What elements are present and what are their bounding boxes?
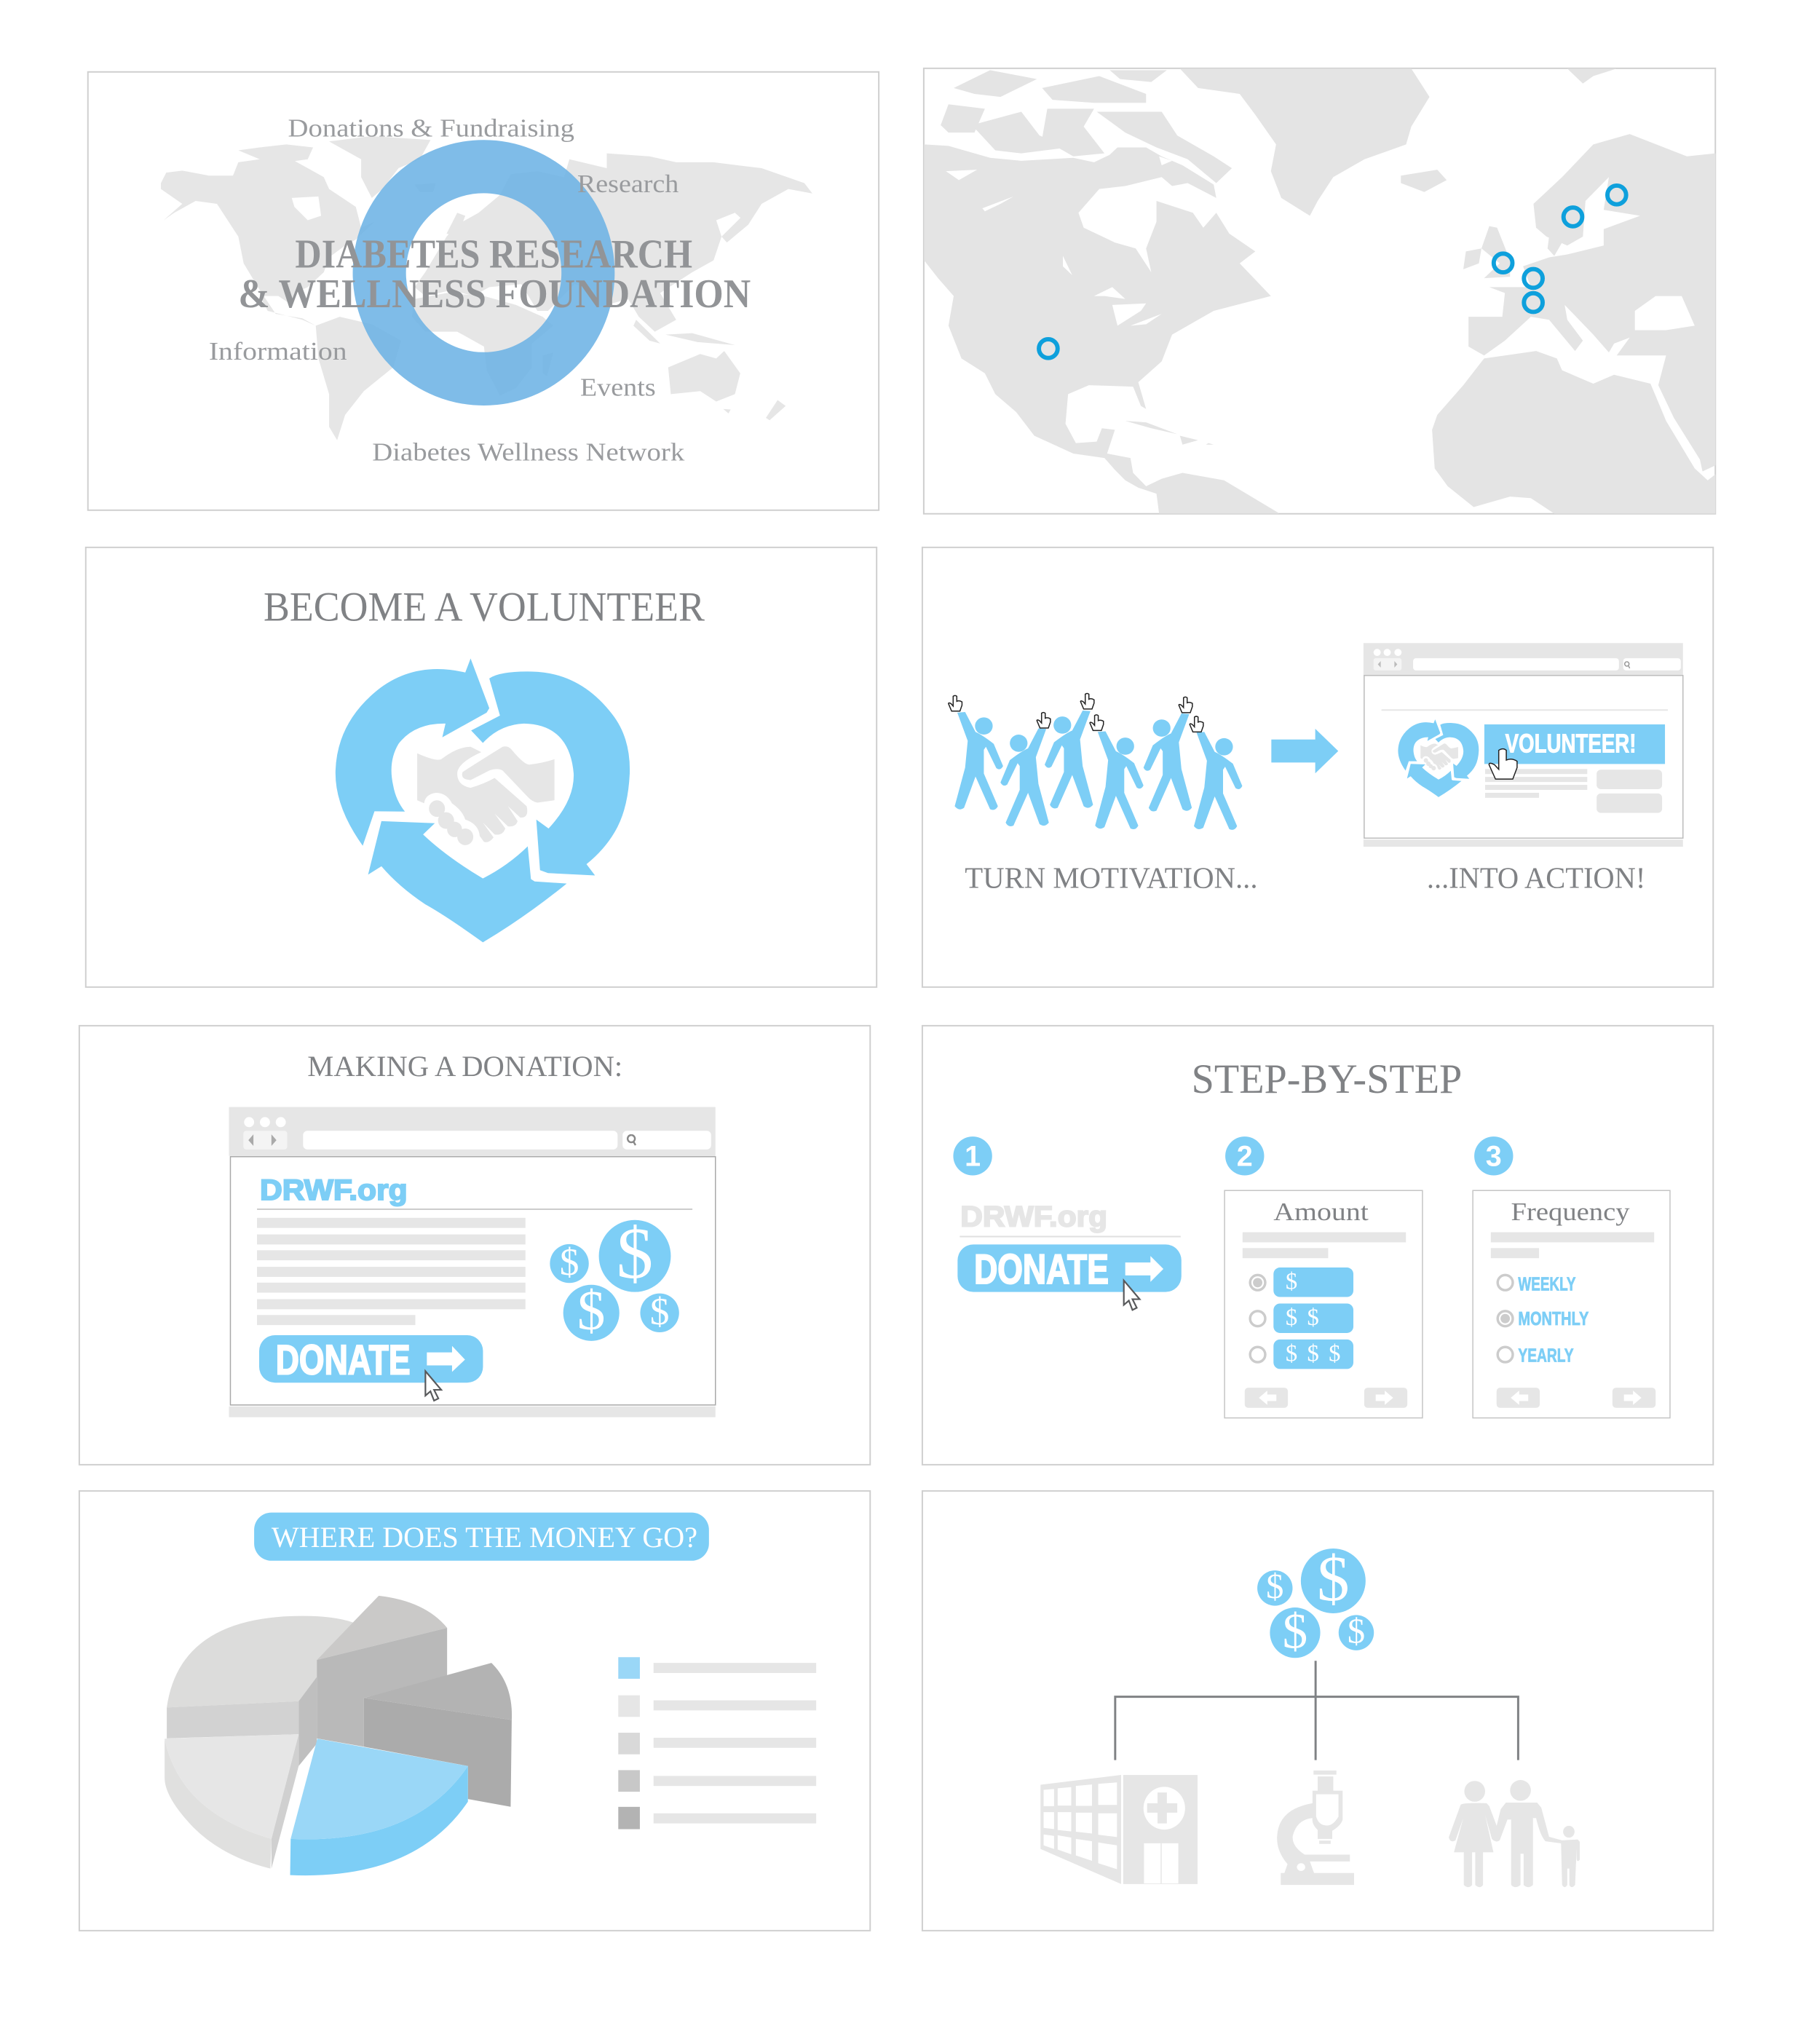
heading pill (254, 1513, 709, 1561)
location marker: Finland (1607, 186, 1626, 205)
heading pill: WHERE DOES THE MONEY GO? (272, 1521, 697, 1554)
form: amount: $ (1307, 1305, 1319, 1331)
icon: cursor (1124, 1281, 1139, 1310)
donate button: DONATE (276, 1337, 411, 1383)
caption: into action: ...INTO ACTION! (1427, 861, 1645, 894)
label: Information: Information (209, 338, 347, 365)
icon: microscope (1277, 1771, 1354, 1885)
icon: cursor (425, 1371, 441, 1401)
location marker: Germany (1524, 269, 1543, 288)
panel: foundation overview (88, 72, 879, 510)
icon: dollar coins: $ (1317, 1543, 1350, 1615)
panel border (924, 68, 1715, 514)
form: frequency: WEEKLY (1518, 1275, 1575, 1295)
icon: dollar coins: $ (1266, 1567, 1283, 1606)
heading: MAKING A DONATION: (307, 1050, 622, 1083)
icon: dollar coins: $ (577, 1279, 605, 1342)
site name grey: DRWF.org (960, 1201, 1107, 1233)
icon: dollar coins: $ (617, 1212, 653, 1294)
panel: turn motivation into action (922, 547, 1713, 987)
label: Research: Research (577, 170, 678, 198)
label: Donations & Fundraising: Donations & Fundraising (288, 115, 574, 143)
site name: DRWF.org (260, 1174, 408, 1206)
world map background (161, 136, 812, 440)
location marker: Switzerland (1524, 293, 1543, 312)
group of people with cursor hands (949, 693, 1242, 830)
caption: turn motivation: TURN MOTIVATION... (965, 861, 1258, 894)
icon: heart of arrows with handshake (336, 659, 630, 942)
step number 1: 1 (965, 1141, 981, 1173)
icon: hospital (1040, 1775, 1198, 1884)
heading: BECOME A VOLUNTEER (264, 585, 705, 630)
form: frequency: YEARLY (1518, 1346, 1574, 1366)
step number 2: 2 (1237, 1141, 1253, 1173)
icon: dollar coins: $ (650, 1289, 669, 1333)
icon: dollar coins (550, 1212, 679, 1342)
panel border (79, 1026, 870, 1465)
browser window (229, 1107, 716, 1417)
form: frequency (1473, 1190, 1670, 1418)
panel: step by step (922, 1026, 1713, 1465)
form: amount (1224, 1190, 1423, 1418)
icon: dollar coins (1257, 1543, 1374, 1658)
browser window: volunteer page: VOLUNTEER! (1506, 729, 1637, 759)
label: Events: Events (580, 374, 656, 402)
label: Diabetes Wellness Network: Diabetes Wellness Network (372, 439, 685, 467)
icon: dollar coins: $ (1348, 1612, 1365, 1650)
form: frequency: Frequency (1511, 1198, 1630, 1226)
location marker: Sweden (1564, 207, 1582, 226)
panel border (88, 72, 879, 510)
step number 3 (1474, 1136, 1513, 1176)
form: frequency: MONTHLY (1518, 1309, 1588, 1329)
form: amount: $ (1329, 1341, 1340, 1367)
form: amount: Amount (1273, 1198, 1369, 1226)
arrow (1271, 729, 1338, 773)
organisation name: DIABETES RESEARCH (295, 232, 692, 277)
form: amount: $ (1286, 1305, 1297, 1331)
browser window: volunteer page (1364, 643, 1683, 847)
panel border (922, 1491, 1713, 1931)
panel border (922, 1026, 1713, 1465)
form: amount: $ (1286, 1269, 1297, 1295)
icon: family (1449, 1780, 1580, 1887)
location marker: UK (1494, 253, 1512, 272)
form: amount: $ (1307, 1341, 1319, 1367)
tree connector lines (1115, 1661, 1518, 1760)
panel border (922, 547, 1713, 987)
location marker: USA (1039, 339, 1058, 358)
3D pie chart (165, 1596, 512, 1875)
panel border (79, 1491, 870, 1931)
panel: where funds are allocated (922, 1491, 1713, 1931)
icon: dollar coins: $ (560, 1240, 579, 1284)
blue ring logo (379, 167, 588, 379)
panel: office locations map (924, 68, 1715, 514)
organisation name (238, 232, 751, 317)
text placeholder lines (257, 1209, 692, 1325)
icon: dollar coins: $ (1283, 1602, 1307, 1658)
panel border (86, 547, 877, 987)
step number 1 (953, 1136, 992, 1176)
panel: where does the money go (79, 1491, 870, 1931)
step number 3: 3 (1486, 1141, 1502, 1173)
panel: become a volunteer (86, 547, 877, 987)
heading: STEP-BY-STEP (1192, 1056, 1462, 1102)
north atlantic map (924, 68, 1715, 513)
organisation name: & WELLNESS FOUNDATION (238, 272, 751, 317)
step number 2 (1225, 1136, 1264, 1176)
legend (618, 1657, 816, 1830)
form: amount: $ (1286, 1341, 1297, 1367)
donate button: DONATE (974, 1246, 1109, 1293)
panel: making a donation (79, 1026, 870, 1465)
